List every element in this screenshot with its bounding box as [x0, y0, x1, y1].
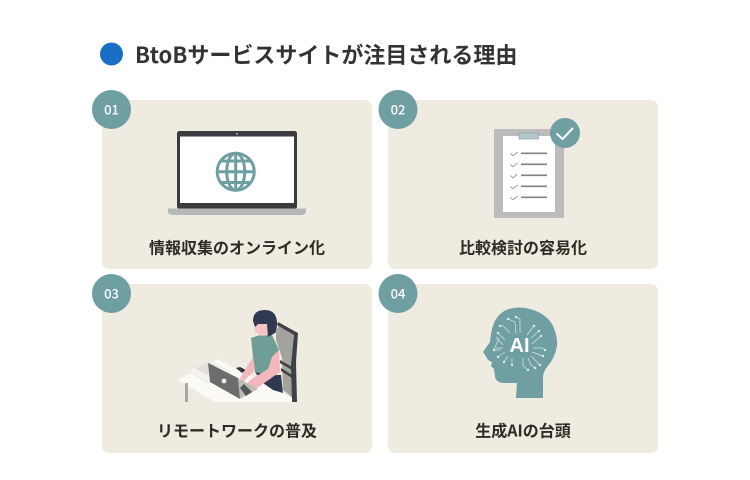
icon: AI head: AI — [510, 335, 530, 357]
badge 03 — [92, 274, 131, 313]
badge 04: 04 — [391, 284, 406, 302]
icon: AI head — [483, 308, 557, 398]
icon: laptop with globe — [168, 131, 306, 215]
heading bullet — [100, 42, 123, 66]
panel: rise of generative AI — [378, 274, 658, 453]
icon: woman working on a laptop — [178, 310, 298, 402]
badge 02: 02 — [391, 100, 405, 118]
panel: easier comparison — [378, 90, 658, 269]
panel: online information gathering — [92, 90, 372, 269]
label: 生成AIの台頭 — [475, 418, 571, 442]
label: 情報収集のオンライン化 — [149, 234, 325, 258]
badge 02 — [378, 90, 418, 129]
label: 比較検討の容易化 — [459, 234, 587, 258]
label: リモートワークの普及 — [157, 418, 317, 442]
badge 03: 03 — [104, 284, 119, 302]
badge 01 — [92, 90, 131, 129]
title: BtoBサービスサイトが注目される理由 — [135, 38, 517, 70]
icon: clipboard checklist — [494, 118, 580, 218]
panel: spread of remote work — [92, 274, 372, 453]
badge 04 — [378, 274, 418, 313]
badge 01: 01 — [104, 100, 119, 118]
